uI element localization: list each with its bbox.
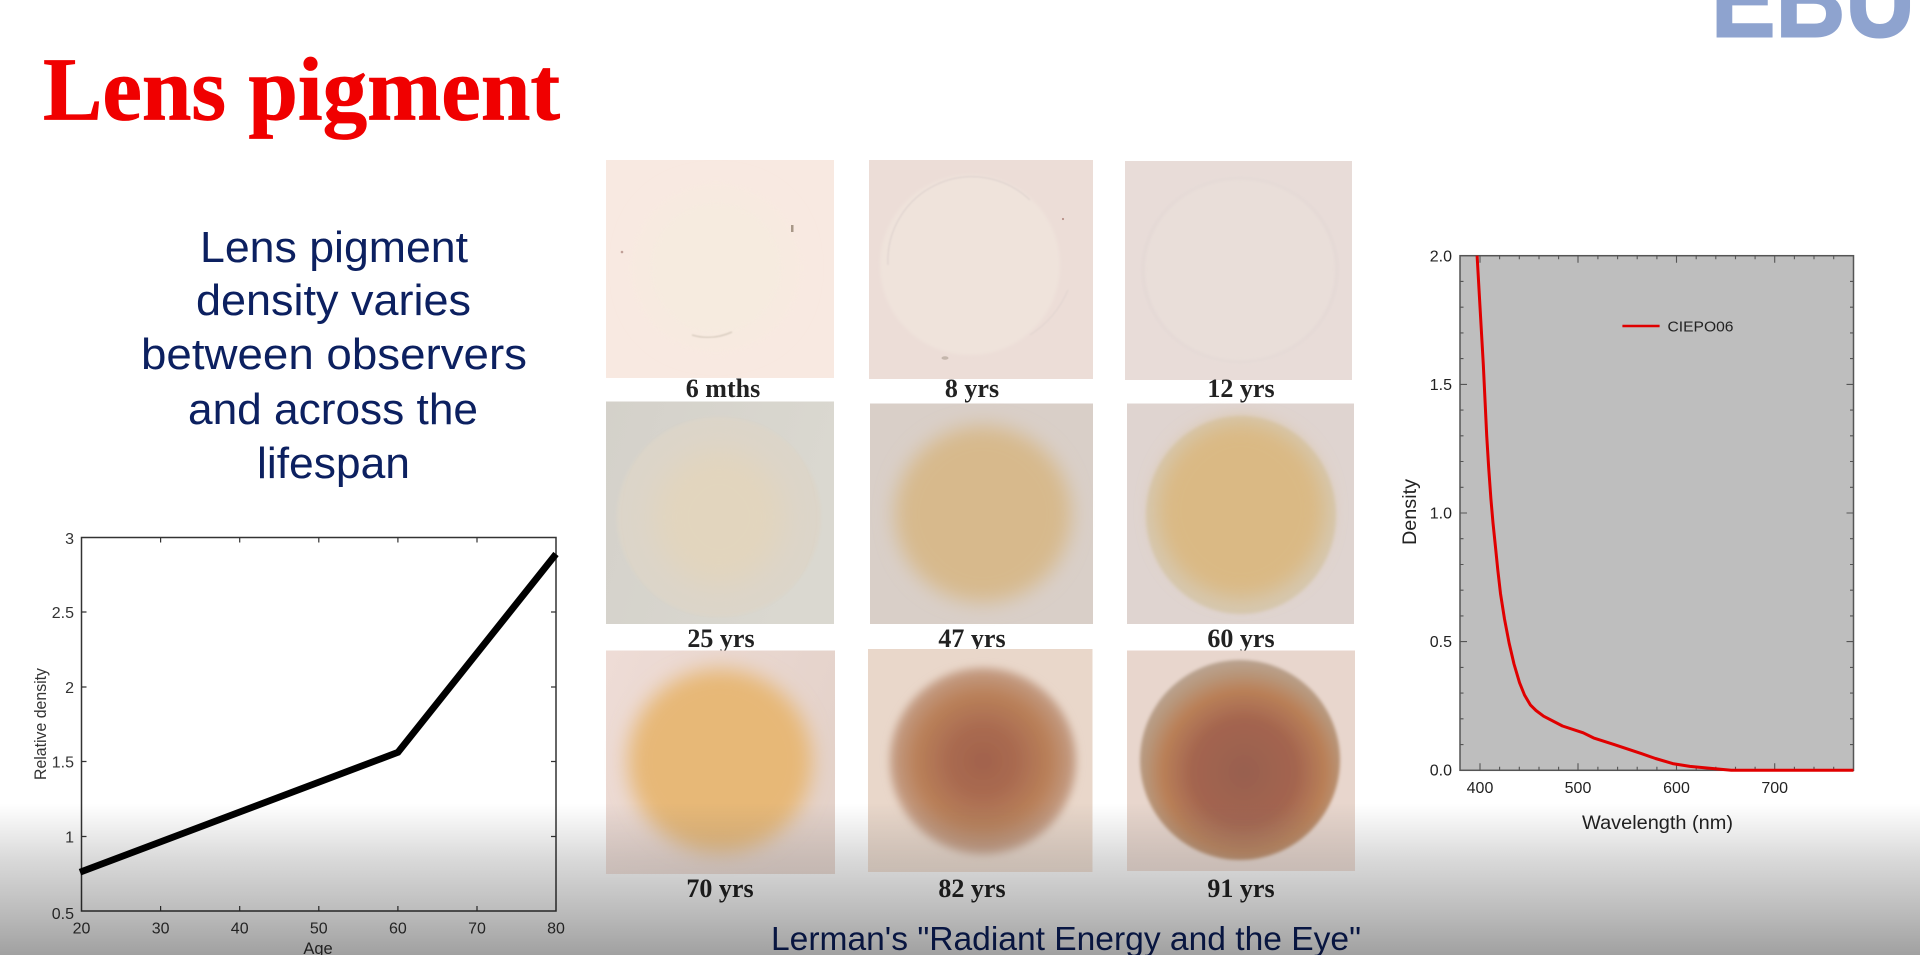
panel: lens photograph 6 months xyxy=(606,160,834,403)
data line xyxy=(80,554,556,872)
panel: lens photograph 70 years xyxy=(606,650,835,903)
x axis labels xyxy=(73,920,565,938)
x axis labels: 700 xyxy=(1761,780,1788,797)
label: 8 yrs xyxy=(945,374,999,403)
x axis labels: 400 xyxy=(1467,780,1493,797)
y axis labels: 3 xyxy=(65,531,74,548)
y axis labels xyxy=(52,531,74,923)
text block: lens pigment density description: between observers xyxy=(141,330,527,379)
x axis labels: 30 xyxy=(152,920,170,938)
y axis labels: 2 xyxy=(65,680,74,697)
x axis labels: 40 xyxy=(231,920,249,938)
title: Lens pigment xyxy=(43,40,560,140)
y axis labels: 1.5 xyxy=(52,754,74,772)
panel: lens photograph 12 years xyxy=(1125,161,1352,403)
y axis labels: 1.0 xyxy=(1430,506,1452,522)
y axis title: Relative density xyxy=(31,668,50,780)
label: 91 yrs xyxy=(1207,874,1275,903)
legend xyxy=(1622,318,1734,336)
panel: lens photograph 8 years xyxy=(869,160,1093,403)
x axis title: Wavelength (nm) xyxy=(1582,813,1733,834)
panel: lens photograph 91 years xyxy=(1127,650,1355,903)
y axis labels: 1.5 xyxy=(1430,377,1452,394)
bottom shadow overlay xyxy=(0,803,1920,955)
panel: lens photograph 25 years xyxy=(606,402,834,653)
y axis labels: 2.0 xyxy=(1430,248,1452,266)
text block: lens pigment density description: density varies xyxy=(196,276,471,325)
panel: lens photograph 82 years xyxy=(868,649,1092,903)
x axis labels: 50 xyxy=(310,920,328,938)
y axis labels xyxy=(1430,248,1452,780)
y axis labels: 0.5 xyxy=(52,906,74,923)
label: 47 yrs xyxy=(938,624,1006,653)
line chart: relative density by age xyxy=(31,531,565,955)
text block: lens pigment density description: and across the xyxy=(188,385,478,434)
x axis labels xyxy=(1467,780,1788,797)
label: 25 yrs xyxy=(687,624,755,653)
x axis labels: 80 xyxy=(547,920,565,938)
x axis labels: 60 xyxy=(389,920,407,938)
label: 70 yrs xyxy=(686,874,754,903)
panel: lens photograph 60 years xyxy=(1127,404,1354,653)
label: 12 yrs xyxy=(1207,374,1275,403)
label: 6 mths xyxy=(686,374,760,403)
x axis labels: 600 xyxy=(1663,780,1690,797)
panel: lens photograph 47 years xyxy=(870,404,1093,653)
text block: lens pigment density description: lifespan xyxy=(257,439,410,488)
density curve xyxy=(1477,256,1854,770)
x axis labels: 500 xyxy=(1565,780,1591,797)
text block: lens pigment density description: Lens pigment xyxy=(200,223,468,272)
y axis labels: 2.5 xyxy=(52,605,74,622)
y axis title: Density xyxy=(1400,478,1421,545)
x axis labels: 20 xyxy=(73,920,90,938)
y axis labels: 0.0 xyxy=(1430,762,1452,780)
x axis labels: 70 xyxy=(468,920,486,938)
y axis labels: 0.5 xyxy=(1430,634,1452,651)
text block: lens pigment density description xyxy=(141,223,527,488)
y axis labels: 1 xyxy=(65,830,74,846)
label: 60 yrs xyxy=(1207,624,1275,653)
label: 82 yrs xyxy=(938,874,1006,903)
line chart: lens density by wavelength xyxy=(1400,248,1854,834)
legend: CIEPO06 xyxy=(1668,318,1734,336)
